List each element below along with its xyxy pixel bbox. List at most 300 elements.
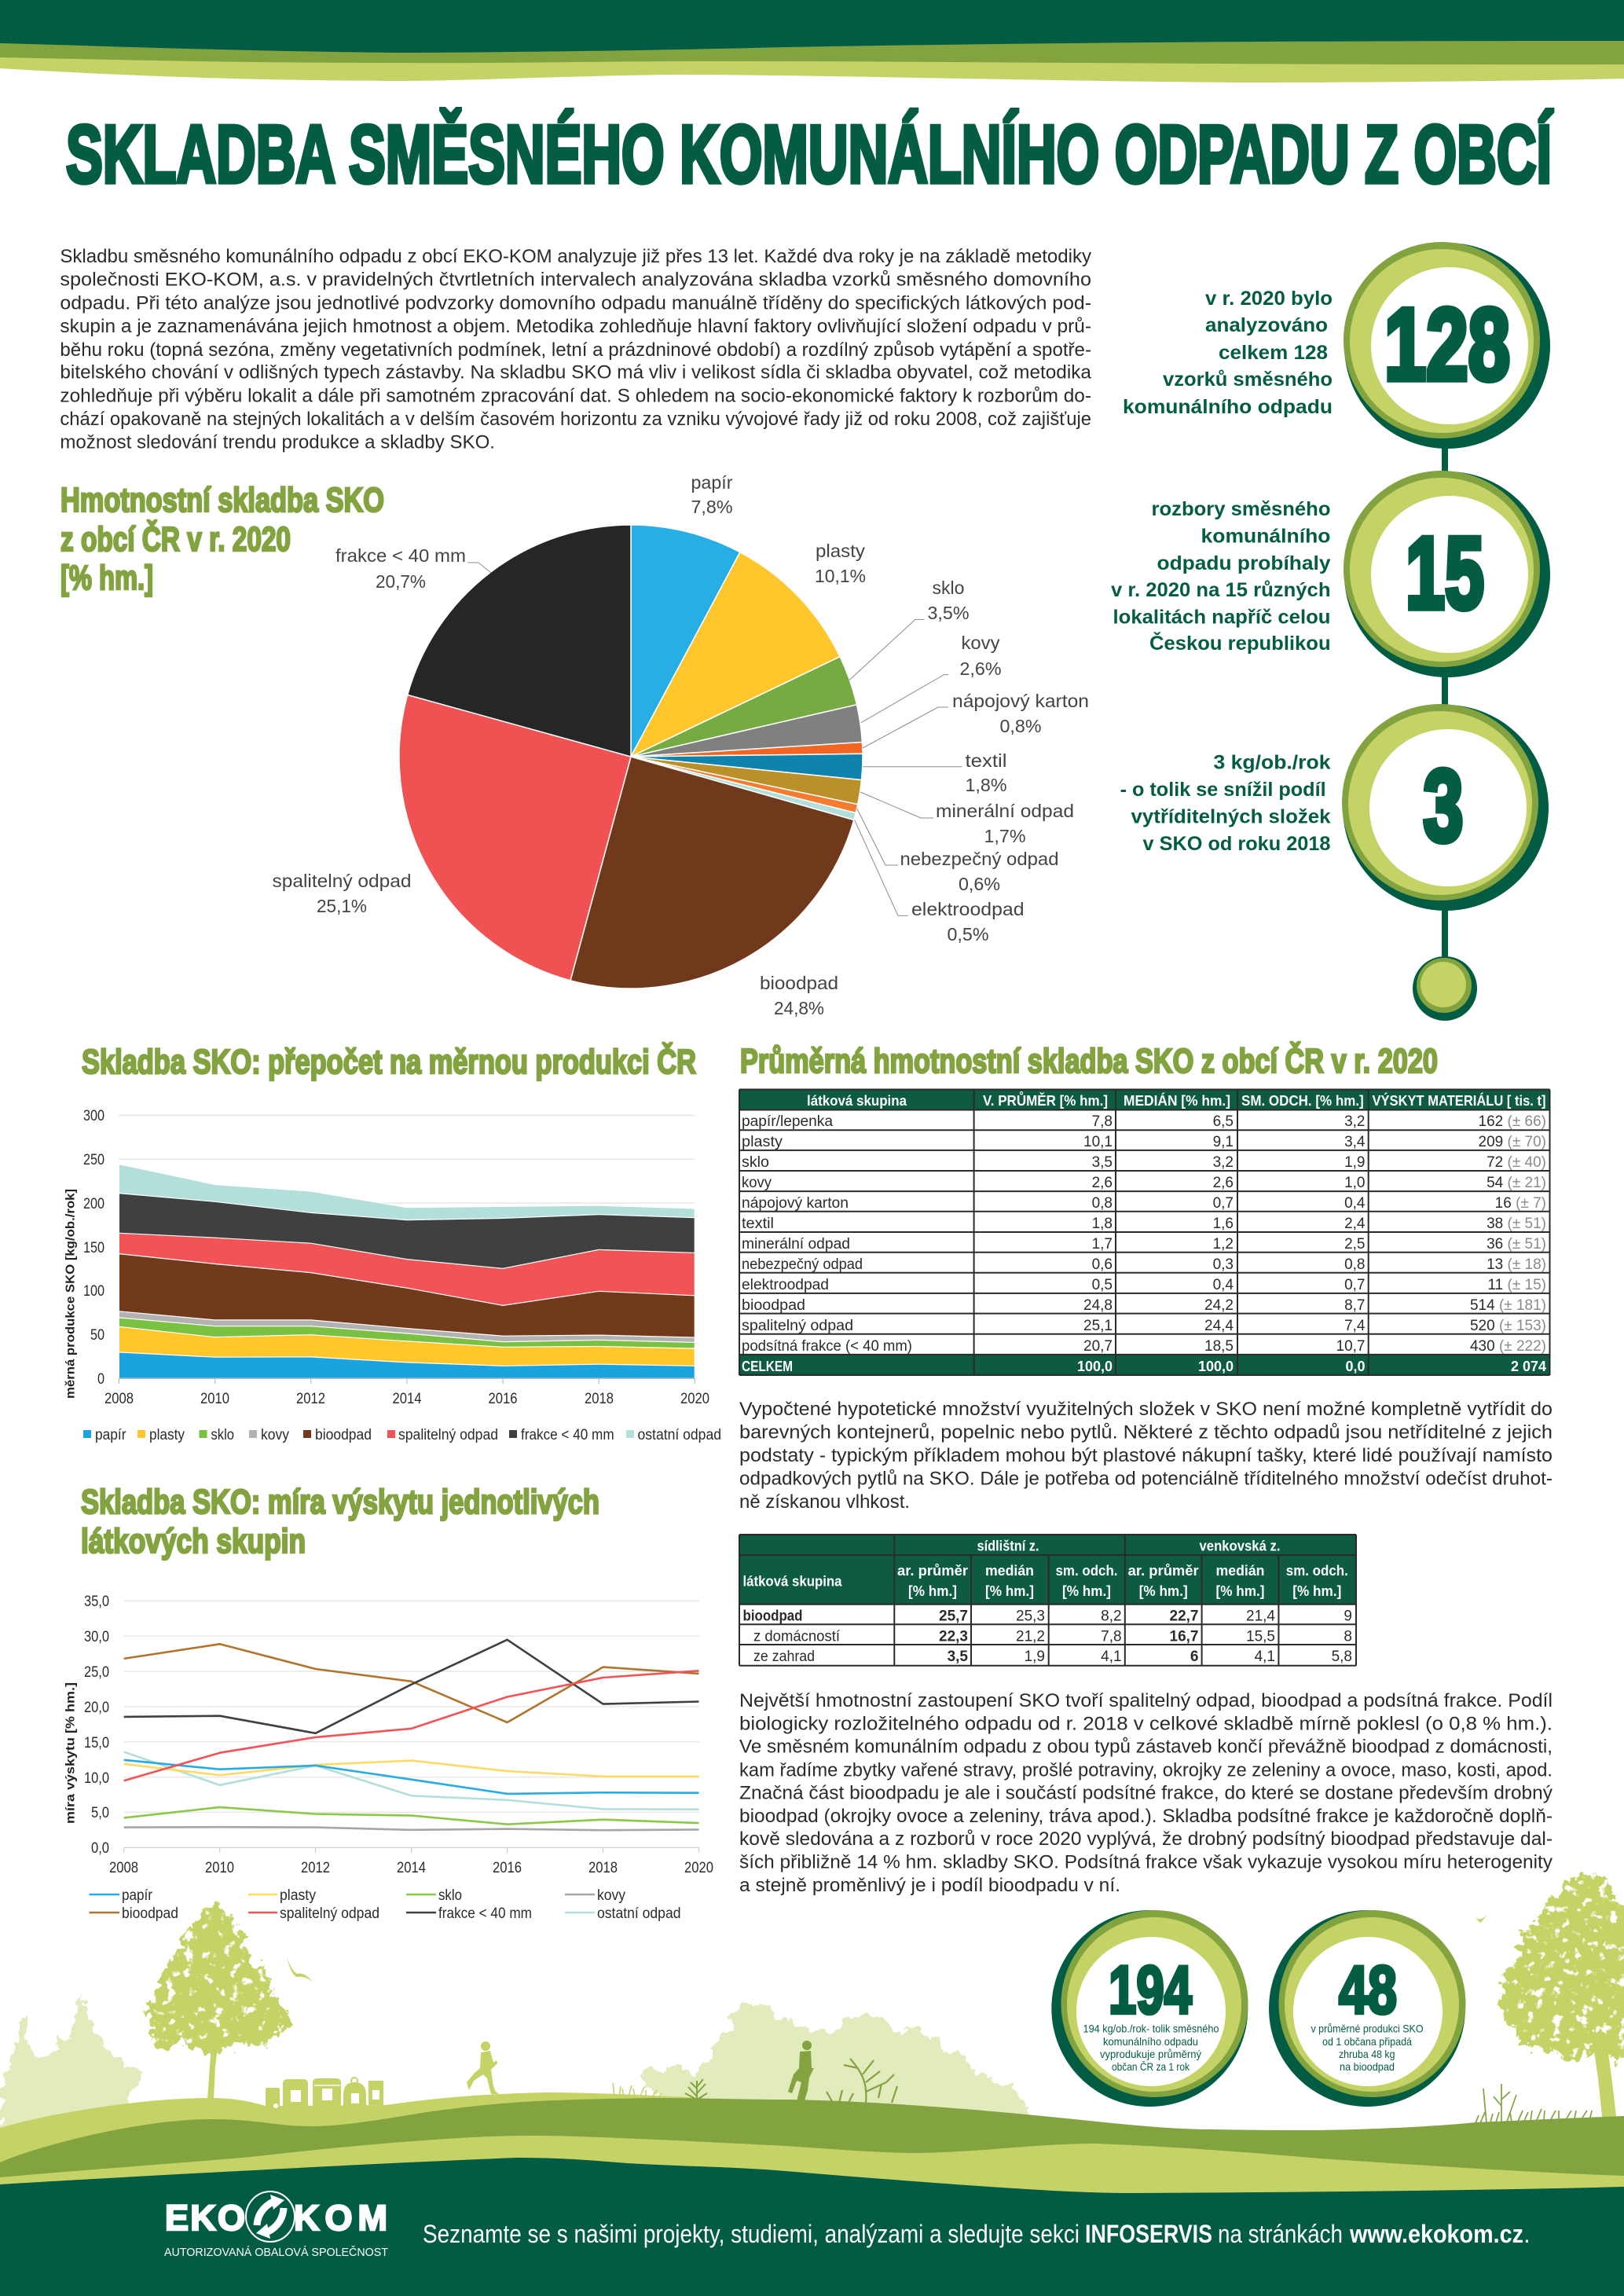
table header row: látková skupina <box>807 1093 907 1109</box>
table total row: 100,0 <box>1198 1359 1234 1374</box>
stat circle: 48 <box>1269 1910 1466 2107</box>
text block: biowaste commentary: bioodpad (okrojky ovoce a zeleniny, tráva apod.). Skladba podsítné frakce je každoročně doplň- <box>739 1806 1553 1827</box>
second table rows: 3,5 <box>948 1649 968 1665</box>
stat text: 128: analyzováno <box>1205 314 1328 336</box>
panel: key figures timeline <box>1111 242 1550 1021</box>
line chart y axis labels: 35,0 <box>84 1594 109 1610</box>
pie labels: nápojový karton <box>952 691 1089 711</box>
table column: material amount: 13 (± 18) <box>1487 1256 1546 1273</box>
intro text block: Skladbu směsného komunálního odpadu z obcí EKO-KOM analyzuje již přes 13 let. Každé dva roky je na základě metodiky <box>60 246 1091 267</box>
stat text: 3: - o tolik se snížil podíl <box>1120 779 1326 801</box>
text block: hypothetical quantity: ně získanou vlhkost. <box>739 1491 910 1513</box>
area chart x axis labels <box>104 1391 709 1407</box>
table column: median: 24,2 <box>1204 1297 1234 1314</box>
intro text block: společnosti EKO-KOM, a.s. v pravidelných čtvrtletních intervalech analyzována skladba vzorků směsného domovního <box>60 270 1091 291</box>
table header row: V. PRŮMĚR [% hm.] <box>983 1091 1108 1109</box>
line chart x axis labels: 2010 <box>205 1860 234 1876</box>
table first column labels: nápojový karton <box>742 1195 849 1212</box>
second table rows: 8,2 <box>1101 1608 1122 1625</box>
area chart legend: ostatní odpad <box>638 1427 721 1443</box>
table column: median: 1,6 <box>1213 1216 1234 1232</box>
table column: standard deviation: 0,7 <box>1344 1277 1366 1293</box>
stat circle: 48: na bioodpad <box>1340 2060 1395 2073</box>
walker <box>788 2041 814 2101</box>
small grass and plant <box>613 2079 707 2101</box>
header wave band <box>0 0 1624 83</box>
stat text: 15: lokalitách napříč celou <box>1113 607 1331 629</box>
table column: average: 1,8 <box>1092 1216 1113 1232</box>
footer tagline: www.ekokom.cz <box>1349 2220 1523 2248</box>
footer tagline: Seznamte se s našimi projekty, studiemi, analýzami a sledujte sekci <box>423 2220 1080 2248</box>
line chart legend: bioodpad <box>122 1905 178 1922</box>
line chart: occurrence rate <box>64 1594 713 1922</box>
stat circle: 15 <box>1344 471 1550 677</box>
table column: average: 1,7 <box>1092 1236 1113 1253</box>
second table header: medián <box>985 1563 1034 1579</box>
second table rows: 9 <box>1344 1608 1352 1625</box>
text block: biowaste commentary: Značná část bioodpadu je ale i součástí podsítné frakce, do které se dostane především drobný <box>739 1782 1553 1804</box>
pie labels: 25,1% <box>317 896 367 916</box>
line chart legend: frakce < 40 mm <box>438 1905 532 1922</box>
area chart y axis labels: 200 <box>83 1196 104 1212</box>
intro text block: možnost sledování trendu produkce a skladby SKO. <box>60 431 495 453</box>
pie labels: nebezpečný odpad <box>900 849 1059 869</box>
line chart y axis labels <box>84 1594 109 1857</box>
tree left <box>148 1905 289 2100</box>
area chart x axis labels: 2018 <box>585 1391 614 1407</box>
pie labels: frakce < 40 mm <box>335 545 466 566</box>
stat text: 128: vzorků směsného <box>1163 369 1333 391</box>
landscape illustration <box>0 1873 1624 2224</box>
second table rows: z domácností <box>753 1628 841 1645</box>
recycling bins <box>266 2078 383 2109</box>
line chart legend: kovy <box>597 1887 625 1904</box>
area chart x axis labels: 2010 <box>200 1391 229 1407</box>
pie labels: 0,8% <box>999 716 1042 736</box>
stat text: 128: v r. 2020 bylo <box>1205 288 1333 310</box>
second table rows: 7,8 <box>1101 1628 1122 1645</box>
pale bushes centre <box>641 2001 1028 2122</box>
text block: hypothetical quantity: barevných kontejnerů, popelnic nebo pytlů. Některé z těchto odpadů jsou netříditelné z jejich <box>739 1422 1553 1443</box>
table column: material amount: 54 (± 21) <box>1487 1175 1546 1191</box>
table column: median: 6,5 <box>1213 1113 1234 1130</box>
heading: area chart: Skladba SKO: přepočet na měrnou produkci ČR <box>82 1041 696 1081</box>
pie labels: plasty <box>816 541 866 561</box>
table total row: 0,0 <box>1345 1359 1366 1374</box>
runner <box>467 2041 499 2094</box>
second table header <box>743 1539 1348 1599</box>
stat text: 15: komunálního <box>1201 525 1331 547</box>
area chart x axis labels: 2016 <box>489 1391 517 1407</box>
table column: standard deviation: 0,4 <box>1344 1195 1366 1212</box>
area chart legend: plasty <box>149 1427 185 1443</box>
plant by walker <box>827 2059 897 2103</box>
second table rows: 15,5 <box>1246 1628 1275 1645</box>
table column: median: 3,2 <box>1213 1154 1234 1171</box>
line chart x axis labels: 2012 <box>301 1860 330 1876</box>
stat circle: 48: v průměrné produkci SKO <box>1311 2023 1424 2035</box>
second table rows <box>743 1608 1352 1665</box>
second table header: venkovská z. <box>1199 1539 1281 1554</box>
line chart y axis labels: 20,0 <box>84 1700 109 1716</box>
pie labels: textil <box>965 750 1007 771</box>
table column: material amount: 36 (± 51) <box>1487 1236 1546 1253</box>
line chart legend: papír <box>122 1887 153 1904</box>
table column: standard deviation: 0,8 <box>1344 1256 1366 1273</box>
second table header: sídlištní z. <box>977 1539 1039 1554</box>
pie labels: 7,8% <box>691 497 732 517</box>
pie labels: 1,7% <box>984 826 1026 846</box>
line chart y axis labels: 15,0 <box>84 1735 109 1751</box>
table column: standard deviation: 2,4 <box>1344 1216 1366 1232</box>
line chart x axis labels <box>109 1860 713 1876</box>
bird left <box>287 1957 313 1983</box>
area chart legend <box>83 1427 721 1443</box>
pie labels: spalitelný odpad <box>272 871 412 891</box>
footer tagline: INFOSERVIS <box>1085 2220 1212 2248</box>
logo: EKO-KOM: EKO <box>165 2198 245 2238</box>
pie labels <box>272 472 1089 1018</box>
table first column labels: nebezpečný odpad <box>742 1256 863 1273</box>
pie labels: elektroodpad <box>911 899 1025 919</box>
pie labels: minerální odpad <box>936 801 1074 821</box>
table column: material amount: 162 (± 66) <box>1479 1113 1546 1130</box>
second table header: medián <box>1216 1563 1265 1579</box>
intro text block: odpadu. Při této analýze jsou jednotlivé podvzorky domovního odpadu manuálně tříděny do specifických látkových pod- <box>60 292 1091 314</box>
line chart x axis labels: 2020 <box>684 1860 713 1876</box>
area chart legend: papír <box>95 1427 126 1443</box>
table column: material amount: 514 (± 181) <box>1470 1297 1546 1314</box>
text block: biowaste commentary: biologicky rozložitelného odpadu od r. 2018 v celkové skladbě mírně poklesl (o 0,8 % hm.). <box>739 1713 1553 1734</box>
second table rows: 25,3 <box>1016 1608 1045 1625</box>
stat text: 15: Českou republikou <box>1149 631 1331 655</box>
table first column labels: bioodpad <box>742 1297 805 1314</box>
pie labels: 0,6% <box>959 874 1000 894</box>
area chart y axis labels: 300 <box>83 1108 104 1124</box>
pie labels: 20,7% <box>376 571 426 592</box>
tree right <box>1500 1873 1624 2123</box>
second table header: látková skupina <box>743 1573 842 1589</box>
table header row <box>807 1091 1546 1109</box>
lower hill <box>0 2136 1624 2224</box>
table column: median <box>1204 1113 1234 1355</box>
second table rows: ze zahrad <box>753 1649 815 1665</box>
pie labels: 2,6% <box>960 658 1001 679</box>
table column: average: 24,8 <box>1083 1297 1113 1314</box>
second table rows: 22,3 <box>939 1628 968 1645</box>
pie labels: 10,1% <box>815 566 866 586</box>
stat text: 3: 3 kg/ob./rok <box>1213 751 1331 773</box>
table: biowaste by housing type <box>739 1535 1356 1666</box>
line chart x axis labels: 2008 <box>109 1860 138 1876</box>
table: average composition <box>739 1089 1549 1375</box>
intro text block: skupin a je zaznamenávána jejich hmotnost a objem. Metodika zohledňuje hlavní faktory ovlivňující složení odpadu v prů- <box>60 316 1091 337</box>
table column: standard deviation: 10,7 <box>1336 1338 1366 1355</box>
table first column labels: papír/lepenka <box>742 1113 833 1130</box>
back hill <box>0 2092 786 2184</box>
second table rows: 21,2 <box>1016 1628 1045 1645</box>
stat circle: 3: 3 <box>1424 748 1463 863</box>
table column: median: 9,1 <box>1213 1134 1234 1150</box>
stat circle: 3 <box>1342 704 1549 911</box>
table column: material amount: 11 (± 15) <box>1487 1277 1546 1293</box>
table first column labels: textil <box>742 1216 774 1232</box>
stat text: 128 <box>1123 288 1333 418</box>
line chart x axis labels: 2018 <box>588 1860 618 1876</box>
line chart legend: sklo <box>438 1887 462 1904</box>
second table header: [% hm.] <box>1062 1583 1111 1599</box>
text block: biowaste commentary: kam řadíme zbytky vařené stravy, prošlé potraviny, okrojky ze zeleniny a ovoce, maso, kosti, apod. <box>739 1759 1553 1781</box>
stat circle: 194: 194 kg/ob./rok- tolik směsného <box>1083 2023 1219 2035</box>
pie labels: bioodpad <box>760 973 838 993</box>
area chart legend: bioodpad <box>315 1427 372 1443</box>
line chart y axis labels: 5,0 <box>91 1805 109 1821</box>
second table header: ar. průměr <box>897 1563 968 1579</box>
table column: material amount <box>1470 1113 1546 1355</box>
heading: line chart <box>81 1483 599 1561</box>
second table rows: 4,1 <box>1101 1649 1122 1665</box>
pie labels: 3,5% <box>927 603 970 623</box>
second table header: sm. odch. <box>1286 1563 1348 1579</box>
stat circle: 194: 194 <box>1109 1953 1192 2028</box>
heading: line chart: látkových skupin <box>81 1522 306 1561</box>
table header row: MEDIÁN [% hm.] <box>1124 1092 1230 1109</box>
stat circle: 194 <box>1051 1910 1248 2107</box>
stat text: 15: rozbory směsného <box>1152 498 1331 520</box>
timeline end dot <box>1413 956 1477 1021</box>
stat circle: 194: vyprodukuje průměrný <box>1100 2048 1201 2060</box>
stat circle: 128 <box>1344 242 1550 449</box>
table column: median: 18,5 <box>1204 1338 1234 1355</box>
footer tagline <box>423 2220 1531 2248</box>
area chart legend: sklo <box>211 1427 234 1443</box>
text block: hypothetical quantity: Vypočtené hypotetické množství využitelných složek v SKO není možné kompletně vytřídit do <box>739 1399 1553 1420</box>
text block: biowaste commentary: Největší hmotnostní zastoupení SKO tvoří spalitelný odpad, bioodpad a podsítná frakce. Podíl <box>739 1690 1553 1711</box>
area chart x axis labels: 2012 <box>296 1391 325 1407</box>
second table rows: 4,1 <box>1255 1649 1275 1665</box>
text block: biowaste commentary: a stejně proměnlivý je i podíl bioodpadu v ní. <box>739 1875 1120 1896</box>
table column: average: 0,6 <box>1092 1256 1113 1273</box>
second table rows: 8 <box>1344 1628 1352 1645</box>
area chart y axis labels: 150 <box>83 1240 104 1256</box>
footer band <box>0 2158 1624 2296</box>
line chart legend: ostatní odpad <box>597 1905 680 1922</box>
table first column labels: elektroodpad <box>742 1277 829 1293</box>
intro text block: běhu roku (topná sezóna, změny vegetativních podmínek, letní a prázdninové období) a rozdílný způsob vytápění a spotře- <box>60 339 1091 361</box>
area chart: specific production <box>64 1108 721 1443</box>
area chart y axis labels: 250 <box>83 1152 104 1168</box>
stat circle: 194: občan ČR za 1 rok <box>1112 2060 1190 2073</box>
table column: standard deviation: 2,5 <box>1344 1236 1366 1253</box>
table column: material amount: 16 (± 7) <box>1495 1195 1546 1212</box>
second table rows: 5,8 <box>1332 1649 1352 1665</box>
table column: material amount: 72 (± 40) <box>1487 1154 1546 1171</box>
second table header: [% hm.] <box>1216 1583 1265 1599</box>
table total row <box>742 1359 1546 1374</box>
connector line <box>1442 440 1448 966</box>
area chart x axis labels: 2014 <box>393 1391 422 1407</box>
heading: pie chart <box>60 481 384 597</box>
table column: standard deviation: 7,4 <box>1344 1318 1366 1334</box>
table column: average: 7,8 <box>1092 1113 1113 1130</box>
area chart legend: frakce < 40 mm <box>521 1427 614 1443</box>
second table rows: 22,7 <box>1170 1608 1199 1625</box>
second table rows: bioodpad <box>743 1608 803 1625</box>
logo: EKO-KOM <box>164 2191 388 2259</box>
intro text block: chází opakovaně na stejných lokalitách a v delším časovém horizontu za vzniku vývojové řady již od roku 2008, což zajišťuje <box>60 409 1091 430</box>
table first column labels: spalitelný odpad <box>742 1318 853 1334</box>
table column: standard deviation: 1,0 <box>1344 1175 1366 1191</box>
line chart y axis labels: 10,0 <box>84 1770 109 1787</box>
line chart y axis labels: 0,0 <box>91 1840 109 1857</box>
text block: hypothetical quantity: podstaty - typickým příkladem mohou být plastové nákupní tašky, které lidé používají namísto <box>739 1445 1553 1466</box>
table first column labels: sklo <box>742 1154 769 1171</box>
table column: standard deviation <box>1336 1113 1366 1355</box>
table total row: 100,0 <box>1077 1359 1113 1374</box>
intro text block: zohledňuje při výběru lokalit a dále při samotném zpracování dat. S ohledem na socio-ekonomické faktory k rozborům do- <box>60 385 1091 406</box>
stat circle: 15: 15 <box>1406 515 1484 630</box>
table column: median: 1,2 <box>1213 1236 1234 1253</box>
area chart x axis labels: 2020 <box>680 1391 709 1407</box>
second table header: [% hm.] <box>1139 1583 1188 1599</box>
area chart x axis labels: 2008 <box>104 1391 134 1407</box>
stat text: 15: odpadu probíhaly <box>1157 552 1331 574</box>
line chart x axis labels: 2014 <box>397 1860 426 1876</box>
second table rows: 1,9 <box>1025 1649 1045 1665</box>
table column: material amount: 430 (± 222) <box>1470 1338 1546 1355</box>
table column: average <box>1083 1113 1113 1355</box>
footer tagline: . <box>1523 2220 1531 2248</box>
table first column labels: podsítná frakce (< 40 mm) <box>742 1338 912 1355</box>
table column: standard deviation: 3,4 <box>1344 1134 1366 1150</box>
area chart legend: kovy <box>261 1427 289 1443</box>
area chart legend: spalitelný odpad <box>398 1427 498 1443</box>
line chart y axis labels: 30,0 <box>84 1629 109 1645</box>
table column: average: 0,5 <box>1092 1277 1113 1293</box>
table column: material amount: 38 (± 51) <box>1487 1216 1546 1232</box>
second table rows: 6 <box>1190 1649 1199 1665</box>
bird right <box>1476 1915 1487 1923</box>
table column: average: 10,1 <box>1083 1134 1113 1150</box>
heading: pie chart: Hmotnostní skladba SKO <box>60 481 384 519</box>
second table header: ar. průměr <box>1128 1563 1199 1579</box>
stat text: 15 <box>1111 498 1331 655</box>
table column: median: 0,7 <box>1213 1195 1234 1212</box>
table header row: VÝSKYT MATERIÁLU [ tis. t] <box>1372 1092 1546 1109</box>
line chart x axis labels: 2016 <box>493 1860 522 1876</box>
pie labels: sklo <box>932 578 965 598</box>
table first column labels: minerální odpad <box>742 1236 850 1253</box>
area chart y axis labels: 100 <box>83 1283 104 1300</box>
pie chart: mass composition <box>272 472 1089 1018</box>
text block: hypothetical quantity: odpadkových pytlů na SKO. Dále je potřeba od potenciálně tříditelného množství odečíst druhot- <box>739 1469 1553 1490</box>
pie labels: 24,8% <box>774 998 824 1018</box>
stat circle: 48: 48 <box>1339 1953 1397 2028</box>
table column: standard deviation: 8,7 <box>1344 1297 1366 1314</box>
table column: average: 25,1 <box>1083 1318 1113 1334</box>
table column: average: 3,5 <box>1092 1154 1113 1171</box>
stat circle: 48: zhruba 48 kg <box>1339 2048 1395 2060</box>
text block: biowaste commentary: kově sledována a z rozborů v roce 2020 vyplývá, že drobný podsítný bioodpad představuje dal- <box>739 1828 1553 1850</box>
stat circle: 48: od 1 občana připadá <box>1322 2035 1412 2048</box>
table total row: 2 074 <box>1511 1359 1546 1374</box>
table column: median: 24,4 <box>1204 1318 1234 1334</box>
line chart legend: spalitelný odpad <box>280 1905 379 1922</box>
stat circle: 194: komunálního odpadu <box>1103 2035 1198 2048</box>
table header row: SM. ODCH. [% hm.] <box>1241 1093 1364 1109</box>
pie leader lines <box>467 563 962 915</box>
logo: EKO-KOM: AUTORIZOVANÁ OBALOVÁ SPOLEČNOST <box>164 2246 388 2259</box>
text block: biowaste commentary <box>739 1690 1553 1896</box>
pie labels: papír <box>691 472 733 493</box>
stat text: 3: vytříditelných složek <box>1131 806 1331 828</box>
pie labels: kovy <box>962 633 1000 653</box>
line chart y axis title: míra výskytu [% hm.] <box>64 1682 77 1824</box>
table column: average: 0,8 <box>1092 1195 1113 1212</box>
second table rows: 25,7 <box>939 1608 968 1625</box>
second table header: sm. odch. <box>1056 1563 1117 1579</box>
line chart legend <box>90 1887 680 1922</box>
table column: median: 2,6 <box>1213 1175 1234 1191</box>
table first column labels: plasty <box>742 1134 783 1150</box>
logo: EKO-KOM: KOM <box>294 2198 387 2238</box>
footer tagline: na stránkách <box>1218 2220 1343 2248</box>
table column: standard deviation: 3,2 <box>1344 1113 1366 1130</box>
heading: pie chart: [% hm.] <box>60 559 153 597</box>
stat circle: 128: 128 <box>1384 287 1510 402</box>
text block: biowaste commentary: ších přibližně 14 % hm. skladby SKO. Podsítná frakce však vykazuje vysokou míru heterogenity <box>739 1852 1553 1873</box>
table column: median: 0,3 <box>1213 1256 1234 1273</box>
line chart legend: plasty <box>280 1887 316 1904</box>
area chart y axis title: měrná produkce SKO [kg/ob./rok] <box>64 1189 77 1399</box>
stat text: 15: v r. 2020 na 15 různých <box>1111 579 1331 601</box>
second table header: [% hm.] <box>1292 1583 1341 1599</box>
pale conifers left <box>0 1991 144 2145</box>
table first column labels <box>742 1113 912 1355</box>
logo recycling icon <box>246 2191 295 2242</box>
heading: table: Průměrná hmotnostní skladba SKO z obcí ČR v r. 2020 <box>740 1040 1438 1080</box>
table column: average: 20,7 <box>1083 1338 1113 1355</box>
stat text: 3 <box>1120 751 1331 855</box>
text block: hypothetical quantity <box>739 1399 1553 1513</box>
intro text block: bitelského chování v odlišných typech zástavby. Na skladbu SKO má vliv i velikost sídla či skladba obyvatel, což metodika <box>60 362 1092 383</box>
stat text: 3: v SKO od roku 2018 <box>1142 833 1331 855</box>
table column: material amount: 520 (± 153) <box>1470 1318 1546 1334</box>
table column: standard deviation: 1,9 <box>1344 1154 1366 1171</box>
pie labels: 1,8% <box>965 775 1007 795</box>
table total row: CELKEM <box>742 1359 793 1374</box>
area chart y axis labels: 50 <box>90 1327 104 1344</box>
table column: material amount: 209 (± 70) <box>1479 1134 1546 1150</box>
grass right <box>1476 2084 1592 2123</box>
second table rows: 16,7 <box>1170 1628 1199 1645</box>
second table header: [% hm.] <box>908 1583 957 1599</box>
stat text: 128: komunálního odpadu <box>1123 396 1333 418</box>
table first column labels: kovy <box>742 1175 772 1191</box>
intro text block <box>60 246 1092 453</box>
middle hill <box>0 2098 1624 2200</box>
text block: biowaste commentary: Ve směsném komunálním odpadu z obou typů zástaveb končí převážně bioodpad z domácnosti, <box>739 1737 1553 1757</box>
area chart y axis labels: 0 <box>97 1371 104 1388</box>
heading: pie chart: z obcí ČR v r. 2020 <box>60 519 291 559</box>
table column: average: 2,6 <box>1092 1175 1113 1191</box>
area chart y axis labels <box>83 1108 104 1388</box>
pie labels: 0,5% <box>948 924 988 944</box>
second table rows: 21,4 <box>1246 1608 1275 1625</box>
table column: median: 0,4 <box>1213 1277 1234 1293</box>
stat text: 128: celkem 128 <box>1219 342 1328 364</box>
heading: line chart: Skladba SKO: míra výskytu jednotlivých <box>81 1483 599 1521</box>
